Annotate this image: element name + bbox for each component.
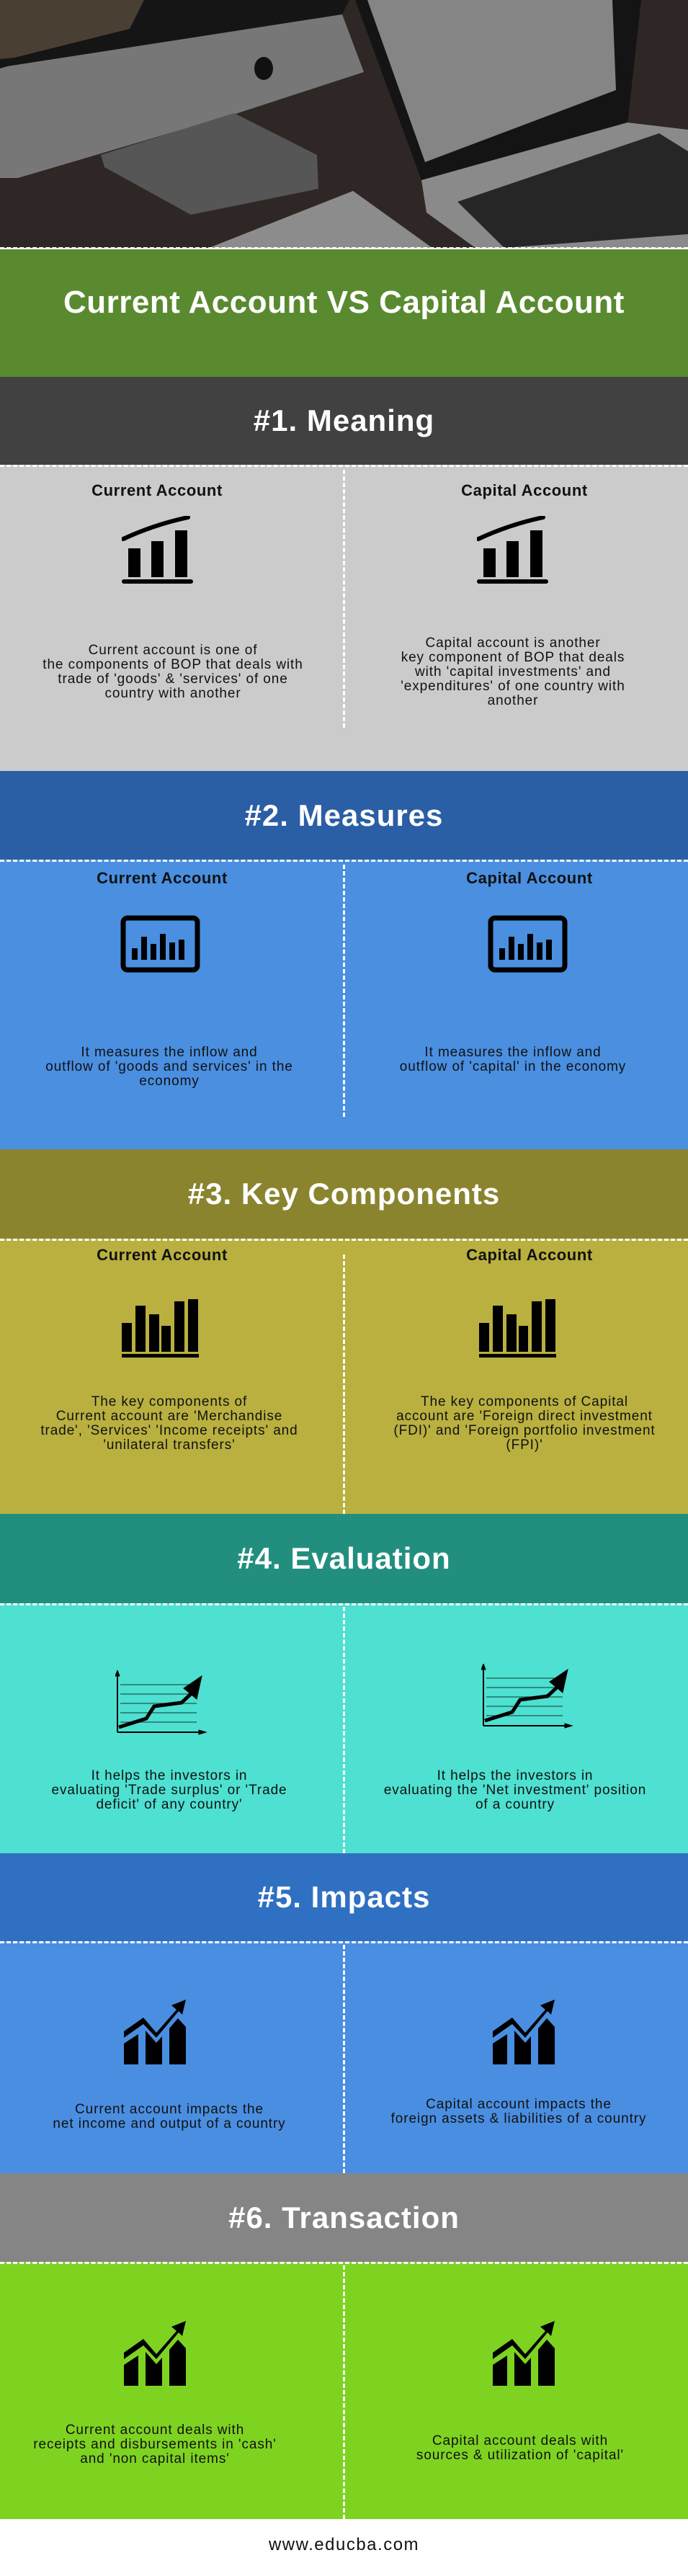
- section 1 header: [0, 377, 688, 465]
- text: current measures: It measures the inflow and: [81, 1045, 258, 1060]
- text: current measures: [45, 1045, 293, 1089]
- text: current impacts: [53, 2102, 286, 2131]
- text: capital evaluation: It helps the investors in: [437, 1768, 593, 1783]
- text: capital measures: outflow of 'capital' in the economy: [400, 1059, 626, 1074]
- text: current impacts: net income and output of a country: [53, 2116, 286, 2131]
- label: capital account: Capital Account: [461, 481, 588, 499]
- icon: bar chart with curve left: [122, 516, 193, 584]
- section 3 header: [0, 1149, 688, 1239]
- icon: line chart left: [115, 1670, 207, 1735]
- text: capital impacts: foreign assets & liabilities of a country: [391, 2111, 646, 2126]
- text: capital measures: It measures the inflow and: [424, 1045, 602, 1060]
- section 5 header: [0, 1853, 688, 1941]
- icon: growth chart right: [493, 2321, 555, 2386]
- laptop base: [421, 122, 688, 248]
- text: capital meaning: Capital account is another: [425, 636, 601, 651]
- section 1 header: #1. Meaning: [254, 404, 434, 437]
- text: current transaction: receipts and disbursements in 'cash': [33, 2437, 277, 2452]
- panel: meaning: [0, 465, 688, 771]
- label: current account: Current Account: [97, 1246, 228, 1264]
- text: capital evaluation: evaluating the 'Net investment' position: [384, 1783, 646, 1798]
- laptop screen: [355, 0, 641, 180]
- header photo: [0, 0, 688, 248]
- text: current impacts: Current account impacts the: [75, 2102, 264, 2117]
- text: current evaluation: [51, 1768, 287, 1812]
- text: capital components: [393, 1394, 656, 1453]
- apple logo: [254, 57, 273, 80]
- section 3 header: #3. Key Components: [188, 1177, 500, 1211]
- panel: impacts: [0, 1941, 688, 2173]
- section 2 header: [0, 771, 688, 860]
- text: capital meaning: 'expenditures' of one country with: [401, 679, 625, 694]
- panel: evaluation: [0, 1603, 688, 1853]
- keyboard: [209, 191, 432, 248]
- section 4 header: #4. Evaluation: [237, 1541, 451, 1575]
- text: current components: [40, 1394, 298, 1453]
- text: capital components: (FPI)': [506, 1438, 543, 1453]
- text: capital components: account are 'Foreign direct investment: [396, 1409, 653, 1424]
- text: capital impacts: [390, 2097, 646, 2126]
- text: capital transaction: Capital account deals with: [432, 2433, 608, 2448]
- label: current account: Current Account: [97, 869, 228, 887]
- section 4 header: [0, 1514, 688, 1603]
- icon: bars left: [122, 1299, 199, 1358]
- text: capital meaning: key component of BOP that deals: [401, 650, 625, 665]
- footer url: www.educba.com: [269, 2535, 419, 2554]
- text: capital meaning: another: [488, 693, 538, 708]
- text: current measures: outflow of 'goods and services' in the: [45, 1059, 293, 1074]
- imac chin: [0, 14, 364, 178]
- text: current components: The key components of: [91, 1394, 247, 1409]
- label: capital account: Capital Account: [466, 1246, 593, 1264]
- panel: key components: [0, 1239, 688, 1514]
- section 2 header: #2. Measures: [245, 798, 443, 832]
- text: current components: Current account are 'Merchandise: [56, 1409, 282, 1424]
- imac screen: [0, 0, 349, 68]
- imac stand: [101, 113, 318, 215]
- text: capital meaning: with 'capital investments' and: [415, 664, 611, 679]
- title: [0, 249, 688, 377]
- text: current components: trade', 'Services' 'Income receipts' and: [40, 1423, 298, 1438]
- icon: monitor chart left: [121, 915, 200, 973]
- section 6 header: #6. Transaction: [228, 2201, 460, 2234]
- text: current measures: economy: [139, 1074, 200, 1089]
- text: current meaning: country with another: [104, 686, 241, 701]
- label: capital account: Capital Account: [466, 869, 593, 887]
- title: Current Account VS Capital Account: [63, 284, 625, 320]
- text: capital components: The key components of Capital: [421, 1394, 628, 1409]
- panel: transaction: [0, 2262, 688, 2519]
- text: current evaluation: deficit' of any country': [96, 1797, 243, 1812]
- text: current meaning: trade of 'goods' & 'services' of one: [58, 672, 288, 687]
- text: current meaning: the components of BOP that deals with: [43, 657, 303, 672]
- icon: growth chart left: [124, 2321, 186, 2386]
- icon: growth chart right: [493, 2000, 555, 2064]
- text: capital components: (FDI)' and 'Foreign portfolio investment: [393, 1423, 656, 1438]
- icon: bar chart with curve right: [477, 516, 548, 584]
- text: current transaction: and 'non capital items': [80, 2451, 230, 2466]
- section 6 header: [0, 2173, 688, 2262]
- text: current transaction: Current account deals with: [66, 2423, 244, 2438]
- text: current transaction: [33, 2423, 277, 2466]
- text: capital transaction: [416, 2433, 624, 2463]
- text: capital evaluation: [384, 1768, 646, 1812]
- text: current evaluation: It helps the investors in: [91, 1768, 247, 1783]
- icon: line chart right: [481, 1664, 573, 1729]
- text: capital measures: [400, 1045, 626, 1074]
- label: current account: Current Account: [91, 481, 223, 499]
- text: current evaluation: evaluating 'Trade surplus' or 'Trade: [51, 1783, 287, 1798]
- section 5 header: #5. Impacts: [258, 1880, 430, 1914]
- text: capital transaction: sources & utilization of 'capital': [416, 2448, 624, 2463]
- icon: growth chart left: [124, 2000, 186, 2064]
- text: current meaning: [43, 643, 303, 701]
- text: capital evaluation: of a country: [475, 1797, 555, 1812]
- icon: bars right: [479, 1299, 556, 1358]
- icon: monitor chart right: [488, 915, 568, 973]
- text: current meaning: Current account is one of: [89, 643, 257, 658]
- text: capital meaning: [401, 636, 625, 708]
- panel: measures: [0, 860, 688, 1149]
- text: current components: 'unilateral transfers': [103, 1438, 236, 1453]
- text: capital impacts: Capital account impacts the: [426, 2097, 612, 2112]
